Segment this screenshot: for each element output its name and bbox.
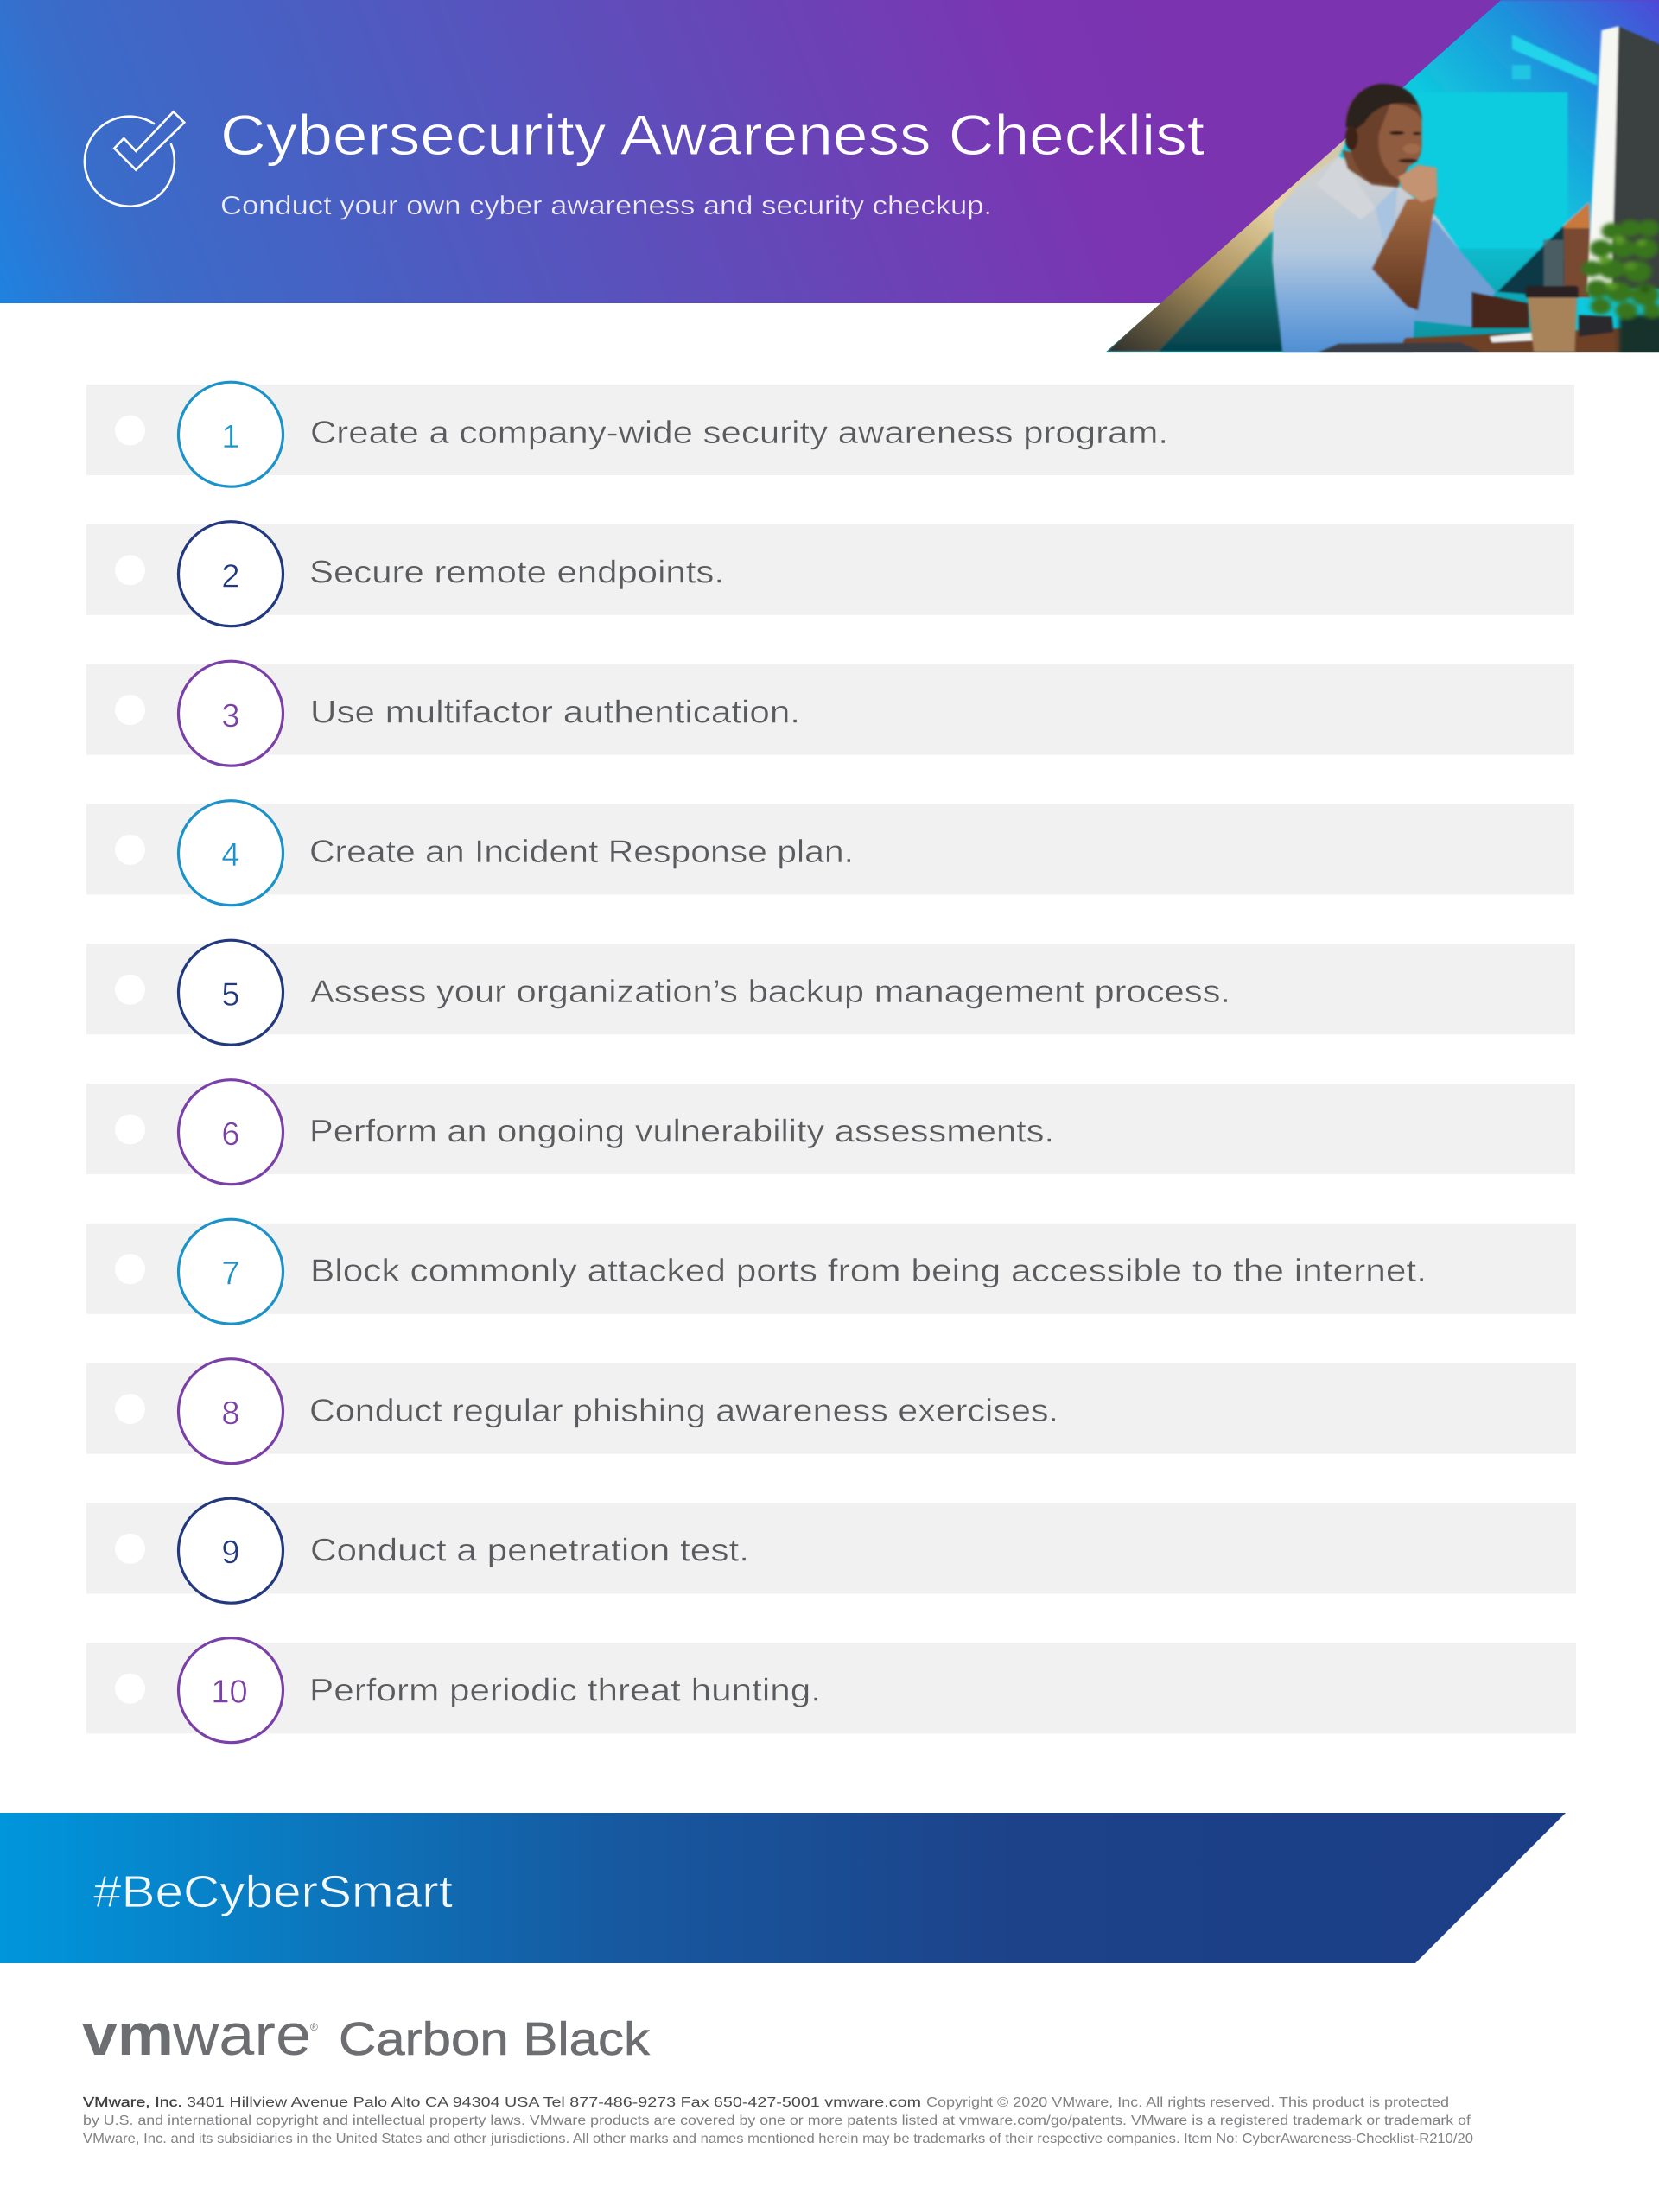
plant bbox=[1581, 219, 1659, 355]
coffee cup bbox=[1526, 240, 1579, 352]
logo: vmware Carbon Black: ® bbox=[310, 2021, 318, 2033]
item 8: 8 bbox=[221, 1395, 240, 1432]
item 5 bbox=[86, 940, 1575, 1045]
logo: vmware Carbon Black bbox=[82, 2002, 651, 2068]
item 6 bbox=[86, 1080, 1575, 1185]
item 1: Create a company-wide security awareness program. bbox=[310, 415, 1168, 450]
item 3 bbox=[86, 661, 1574, 766]
item 5: 5 bbox=[221, 977, 240, 1014]
item 2: 2 bbox=[221, 558, 240, 594]
item 8: Conduct regular phishing awareness exercises. bbox=[309, 1393, 1058, 1428]
item 3: 3 bbox=[221, 698, 240, 734]
logo: vmware Carbon Black: vm bbox=[82, 2002, 174, 2068]
item 4 bbox=[86, 801, 1574, 906]
item 8 bbox=[86, 1359, 1576, 1464]
header banner bbox=[0, 0, 1659, 303]
logo: vmware Carbon Black: ware bbox=[172, 2002, 311, 2068]
logo: vmware Carbon Black: Carbon Black bbox=[339, 2013, 651, 2065]
hashtag banner bbox=[0, 1813, 1566, 1963]
desk, tablet, keyboard bbox=[1317, 219, 1659, 355]
item 5: Assess your organization’s backup management process. bbox=[310, 974, 1230, 1009]
item 1: 1 bbox=[221, 419, 240, 455]
item 10: 10 bbox=[211, 1675, 248, 1711]
legal footer text: VMware, Inc. and its subsidiaries in the United States and other jurisdictions. All other marks and names mentioned herein may be trademarks of their respective companies. Item No: CyberAwareness-Checklist-R210/20 bbox=[83, 2132, 1473, 2146]
item 10: Perform periodic threat hunting. bbox=[309, 1672, 821, 1707]
photo background bbox=[1080, 0, 1659, 359]
legal footer text bbox=[83, 2095, 1473, 2146]
item 1 bbox=[86, 382, 1574, 486]
checklist rows bbox=[86, 382, 1576, 1743]
item 9: Conduct a penetration test. bbox=[310, 1533, 749, 1568]
title: Cybersecurity Awareness Checklist bbox=[220, 103, 1205, 167]
item 7: 7 bbox=[221, 1255, 240, 1292]
item 2 bbox=[86, 522, 1574, 626]
item 4: Create an Incident Response plan. bbox=[309, 834, 854, 869]
item 4: 4 bbox=[221, 837, 240, 874]
item 7: Block commonly attacked ports from being accessible to the internet. bbox=[310, 1253, 1427, 1288]
item 6: Perform an ongoing vulnerability assessments. bbox=[309, 1113, 1054, 1149]
hashtag banner: #BeCyberSmart bbox=[93, 1867, 454, 1917]
photo: man at computer monitor bbox=[1080, 0, 1659, 359]
legal footer text: Copyright © 2020 VMware, Inc. All rights reserved. This product is protected bbox=[926, 2095, 1449, 2110]
legal footer text: 3401 Hillview Avenue Palo Alto CA 94304 USA Tel 877-486-9273 Fax 650-427-5001 vmware.com bbox=[187, 2095, 921, 2110]
item 10 bbox=[86, 1638, 1576, 1743]
monitor bbox=[1586, 26, 1659, 292]
legal footer text: by U.S. and international copyright and intellectual property laws. VMware products are covered by one or more patents listed at vmware.com/go/patents. VMware is a registered trademark or trademark of bbox=[83, 2113, 1471, 2128]
icon: check mark in circle bbox=[85, 111, 184, 207]
item 3: Use multifactor authentication. bbox=[310, 694, 800, 729]
subtitle: Conduct your own cyber awareness and security checkup. bbox=[220, 190, 992, 220]
legal footer text: VMware, Inc. bbox=[83, 2095, 182, 2110]
man bbox=[1272, 84, 1529, 354]
item 9 bbox=[86, 1498, 1576, 1603]
item 2: Secure remote endpoints. bbox=[309, 555, 724, 590]
item 9: 9 bbox=[221, 1535, 240, 1571]
item 7 bbox=[86, 1219, 1576, 1324]
item 6: 6 bbox=[221, 1116, 240, 1153]
